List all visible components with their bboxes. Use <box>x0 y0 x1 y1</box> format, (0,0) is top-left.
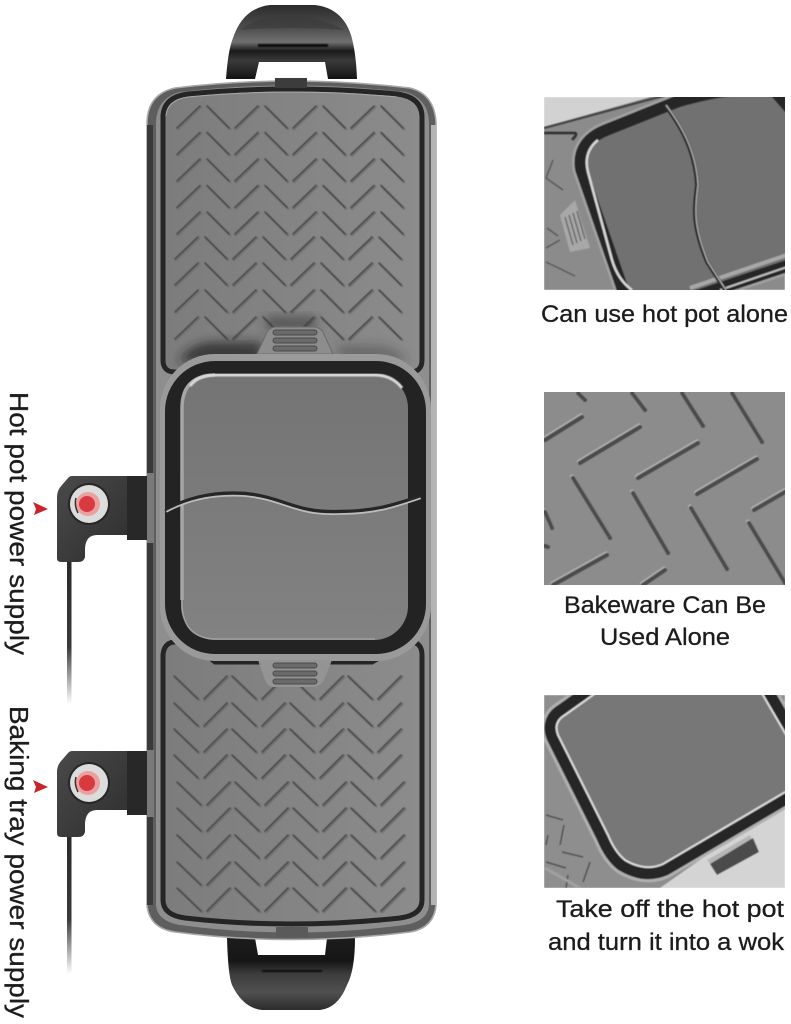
wavy divider <box>167 494 420 514</box>
photo panel: bakeware texture <box>544 392 785 585</box>
label: baking tray power supply: Baking tray power supply <box>4 706 34 1018</box>
photo panel: wok detail <box>544 690 791 888</box>
hot pot power connector <box>57 473 154 704</box>
divider curve <box>665 105 726 290</box>
caption: can use hot pot alone: Can use hot pot alone <box>541 301 788 328</box>
caption: take off the hot pot: Take off the hot pot <box>556 896 784 923</box>
chevron grooves: top plate <box>175 106 404 340</box>
label: hot pot power supply: Hot pot power supply <box>4 392 34 655</box>
baking tray power connector <box>57 750 154 974</box>
handle notches on rim <box>275 78 308 937</box>
top handle <box>226 5 357 79</box>
ridge shadows <box>545 393 785 585</box>
grill body <box>147 81 436 940</box>
hot pot tab <box>707 835 759 875</box>
grooves <box>546 815 590 888</box>
caption: bakeware can be used alone <box>564 592 766 651</box>
arrow: baking tray supply <box>33 780 48 793</box>
top slotted tab <box>257 327 333 354</box>
chevron grooves: bottom plate <box>174 676 405 912</box>
caption: bakeware can be used alone: Used Alone <box>600 624 730 651</box>
caption: take off the hot pot: and turn it into a wok <box>548 929 785 956</box>
shadows around hot pot <box>178 316 408 362</box>
caption: bakeware can be used alone: Bakeware Can Be <box>564 592 766 619</box>
product: electric grill and hot pot <box>147 5 436 1010</box>
bottom slotted tab <box>258 660 332 687</box>
tab and grooves <box>546 160 590 276</box>
arrow: hot pot supply <box>33 502 48 515</box>
bottom handle <box>227 938 355 1010</box>
central hot pot <box>160 354 431 661</box>
caption: take off the hot pot <box>548 896 785 956</box>
top grill plate <box>163 89 422 372</box>
ridge highlights <box>544 392 784 584</box>
photo panel: hot pot detail <box>544 94 791 292</box>
bottom grill plate <box>163 642 422 924</box>
